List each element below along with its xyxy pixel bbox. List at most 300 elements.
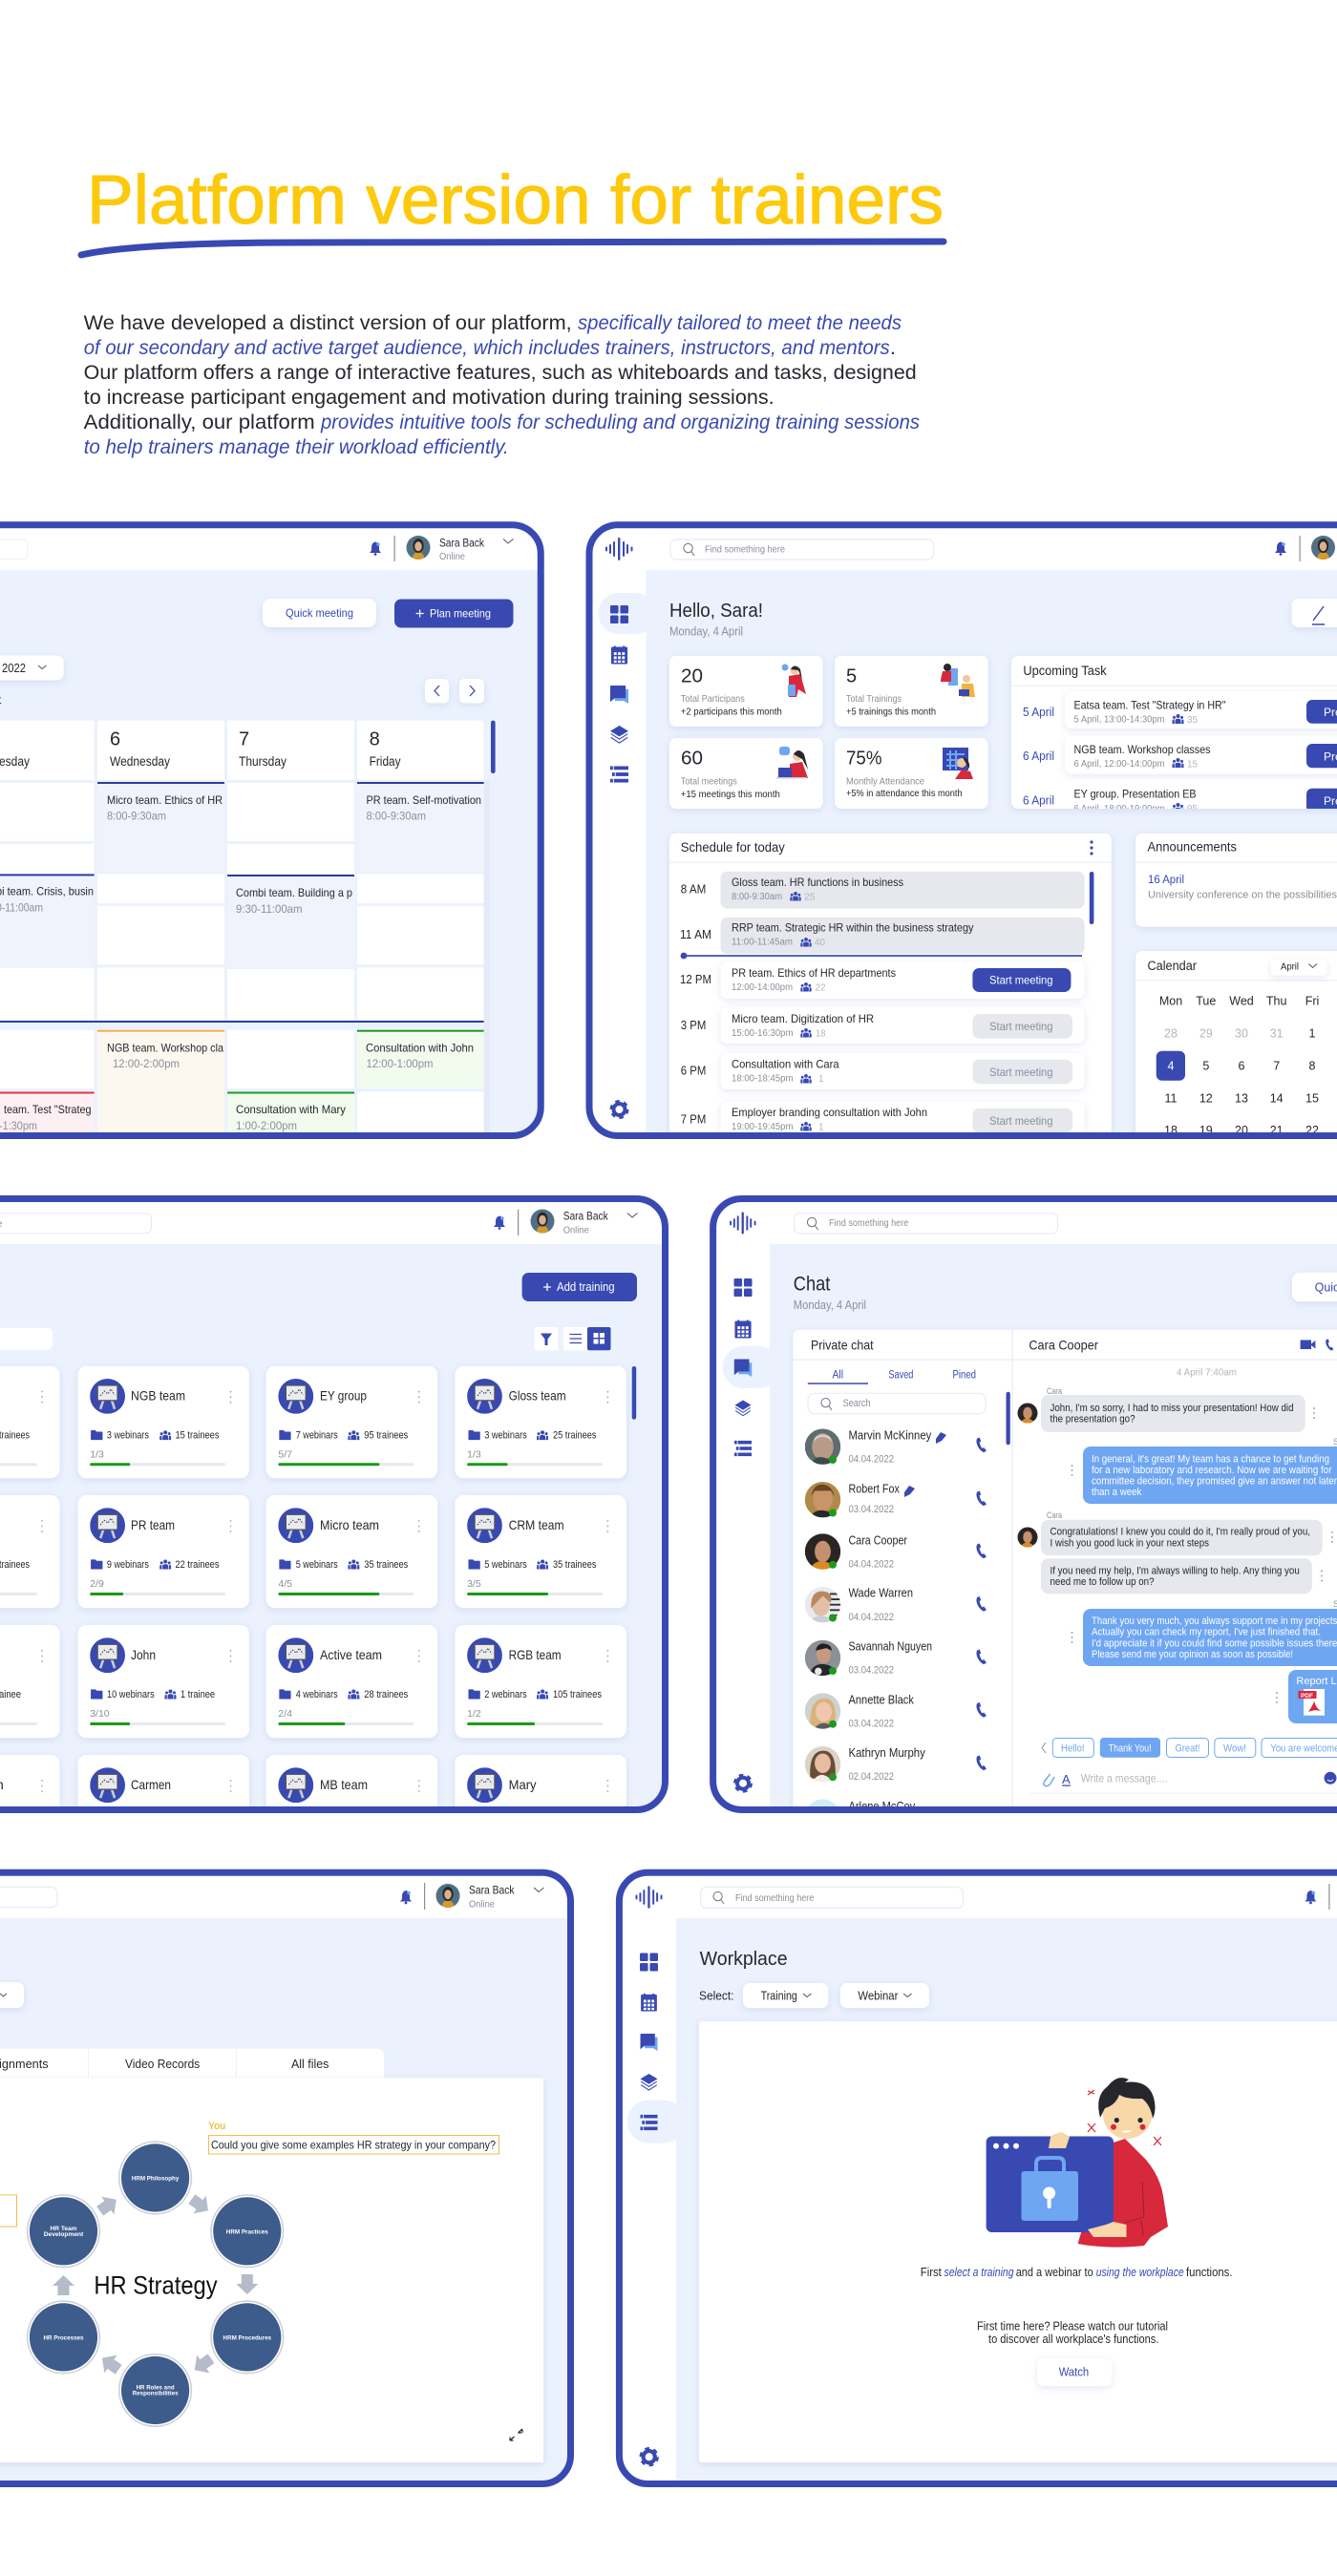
card: Micro team: 4/5 — [278, 1578, 292, 1590]
contact: Kathryn Murphy — [805, 1745, 987, 1783]
contact: Savannah Nguyen: Savannah Nguyen — [848, 1639, 932, 1654]
card: Carmen: Carmen — [131, 1777, 171, 1792]
partial cards column — [0, 1366, 59, 1868]
page heading: Chat — [794, 1274, 830, 1296]
schedule row 4: 18 — [816, 1029, 826, 1039]
private chat list: All — [833, 1369, 843, 1381]
day headers: Friday — [370, 754, 401, 769]
message from Cara 3: need me to follow up on? — [1050, 1576, 1154, 1588]
card: CRM team: 3/5 — [467, 1578, 481, 1590]
scrollbar — [632, 1366, 636, 1420]
card: Micro team: 35 trainees — [364, 1559, 409, 1571]
stat card: attendance: +5% in attendance this month — [846, 788, 963, 799]
calendar widget: Tue — [1196, 995, 1216, 1008]
task row 3: 6 April, 18:00-19:00pm — [1073, 804, 1165, 814]
schedule row 2: RRP team. Strategic HR within the business strategy — [732, 921, 973, 935]
day headers: 7 — [239, 729, 249, 750]
stat card: meetings: +15 meetings this month — [681, 789, 780, 800]
announcements card: University conference on the possibilities — [1148, 890, 1337, 901]
schedule row 4: 15:00-16:30pm — [732, 1028, 793, 1039]
contact: Cara Cooper: Cara Cooper — [848, 1532, 908, 1547]
calendar widget: 14 — [1270, 1092, 1284, 1106]
contact: Arlene McCoy: Arlene McCoy — [848, 1799, 916, 1813]
calendar widget: Mon — [1159, 995, 1182, 1008]
selectors: Webinar — [858, 1989, 898, 2002]
schedule row 1: 25 — [804, 892, 816, 903]
card: Gloss team: 3 webinars — [484, 1430, 527, 1442]
whiteboard content — [0, 2078, 543, 2462]
schedule row 5: 18:00-18:45pm — [732, 1074, 793, 1085]
header bar — [0, 1209, 638, 1236]
card: RGB team: 1/2 — [467, 1708, 481, 1720]
reply message 1 — [1072, 1437, 1337, 1504]
card: CRM team: CRM team — [509, 1517, 564, 1532]
search box — [795, 1214, 1057, 1234]
schedule row 4: 3 PM — [681, 1019, 706, 1032]
search box — [701, 1887, 963, 1908]
arrow: team to philosophy — [94, 2190, 122, 2220]
schedule for today card — [669, 834, 1112, 1149]
schedule row 3: 12:00-14:00pm — [732, 982, 793, 993]
stat card: participants — [669, 656, 823, 727]
calendar widget: 19 — [1199, 1124, 1213, 1137]
watch button: Watch — [1059, 2366, 1089, 2379]
schedule row 2: 40 — [815, 938, 825, 948]
reply message 2: Please send me your opinion as soon as possible! — [1092, 1649, 1293, 1660]
card: NGB team: 1/3 — [90, 1449, 104, 1461]
intro paragraph — [84, 312, 920, 458]
HR strategy diagram — [28, 2142, 284, 2426]
edit button — [1291, 599, 1337, 627]
dropdown — [0, 1982, 24, 2008]
arrow: roles to processes — [96, 2349, 125, 2378]
partial note box — [0, 2195, 17, 2227]
day headers: Thursday — [239, 754, 286, 769]
card: PR team: PR team — [131, 1517, 175, 1532]
contact: Wade Warren — [805, 1586, 987, 1623]
private chat list: Pined — [953, 1369, 976, 1381]
hint text — [921, 2266, 1232, 2279]
quick reply chips: Wow! — [1223, 1743, 1246, 1755]
calendar navigation arrows — [425, 679, 484, 703]
announcements card: 16 April — [1148, 875, 1184, 886]
tabs: ignments — [0, 2057, 49, 2071]
calendar widget: Wed — [1229, 995, 1254, 1008]
calendar widget: 12 — [1199, 1092, 1213, 1106]
plan meeting button: Plan meeting — [430, 607, 491, 621]
stat card: attendance: 75% — [846, 749, 882, 770]
selectors: Training — [761, 1989, 797, 2002]
current time line — [0, 1021, 484, 1023]
task row 1 — [1023, 691, 1337, 728]
node: HR Team Development — [28, 2195, 99, 2268]
card: John: John — [131, 1647, 156, 1662]
stat card: participants: +2 participans this month — [681, 707, 782, 718]
panel: trainings screen — [0, 1198, 668, 1868]
card: Active team — [266, 1625, 437, 1738]
schedule row 1: 8:00-9:30am — [732, 892, 782, 902]
task row 3 — [1024, 789, 1337, 809]
card: PR team — [78, 1495, 249, 1608]
calendar widget: 13 — [1235, 1092, 1248, 1106]
task row 3: 95 — [1187, 804, 1199, 814]
task row 1: 5 April — [1023, 705, 1054, 719]
header bar: Sara Back — [563, 1210, 608, 1223]
day headers: Wednesday — [110, 754, 170, 769]
tutorial text — [977, 2319, 1168, 2346]
notification and avatar — [1275, 536, 1335, 561]
schedule row 6: 7 PM — [681, 1112, 706, 1126]
month dropdown — [0, 655, 64, 707]
schedule row 3: 22 — [816, 983, 826, 993]
partial cards column: trainees — [0, 1430, 30, 1442]
calendar grid — [0, 721, 490, 1140]
calendar widget: 28 — [1164, 1027, 1178, 1041]
panel: workplace screen — [611, 1872, 1337, 2491]
day headers: 8 — [370, 729, 380, 750]
card: PR team: 2/9 — [90, 1578, 104, 1590]
card: EY group — [266, 1366, 437, 1478]
quick reply chips: Thank You! — [1109, 1743, 1152, 1755]
plan meeting button — [394, 600, 514, 628]
upcoming task card — [1011, 656, 1337, 814]
quick meeting button — [1292, 1273, 1337, 1301]
selectors — [699, 1983, 929, 2008]
user note label: Could you give some examples HR strategy in your company? — [211, 2139, 496, 2152]
card: John: 3/10 — [90, 1708, 110, 1720]
panel: materials screen — [0, 1872, 578, 2491]
logo — [605, 538, 632, 560]
calendar widget: 22 — [1305, 1124, 1319, 1137]
event: NGB workshop: NGB team. Workshop cla — [107, 1043, 223, 1054]
schedule row 1: 8 AM — [681, 882, 706, 896]
center label: HR Strategy — [94, 2270, 218, 2299]
intro paragraph: provides intuitive tools for scheduling and organizing training sessions — [320, 412, 920, 433]
page heading: Workplace — [700, 1949, 788, 1970]
month dropdown: 2022 — [2, 662, 26, 675]
message from Cara 2: I wish you good luck in your next steps — [1050, 1537, 1209, 1549]
node: HRM Procedures: HRM Procedures — [223, 2334, 271, 2341]
scrollbar — [491, 721, 496, 773]
card: Mary: Mary — [509, 1777, 537, 1792]
quick reply chips: Great! — [1175, 1743, 1199, 1755]
message from Cara 1: John, I'm so sorry, I had to miss your presentation! How did — [1050, 1403, 1293, 1414]
event: consultation with John: Consultation with John — [366, 1043, 474, 1054]
day headers: 6 — [110, 729, 120, 750]
tutorial text: First time here? Please watch our tutorial — [977, 2319, 1168, 2333]
selectors: Select: — [699, 1988, 733, 2002]
hint text: First — [921, 2266, 942, 2279]
calendar widget: Thu — [1266, 995, 1287, 1008]
schedule row 5: Consultation with Cara — [732, 1058, 839, 1071]
schedule row 4: Micro team. Digitization of HR — [732, 1012, 874, 1025]
quick reply chips — [1042, 1738, 1337, 1758]
contact: Cara Cooper: 04.04.2022 — [848, 1558, 894, 1570]
header bar: Online — [563, 1225, 589, 1236]
contact: Kathryn Murphy: 02.04.2022 — [848, 1771, 894, 1783]
card: RGB team: 105 trainees — [553, 1689, 602, 1700]
node: HR Team Development: HR Team — [50, 2226, 77, 2232]
card: RGB team: 2 webinars — [484, 1689, 527, 1700]
card: Carmen — [78, 1755, 249, 1868]
tutorial text: to discover all workplace's functions. — [988, 2333, 1158, 2346]
sidebar icons — [733, 1278, 753, 1791]
node: HRM Practices — [211, 2195, 284, 2268]
card: RGB team — [455, 1625, 626, 1738]
calendar widget: 5 — [1202, 1060, 1209, 1073]
node: HR Processes — [28, 2301, 99, 2374]
card: NGB team: NGB team — [131, 1388, 185, 1404]
node: HR Roles and Responsibilities: Responsibilities — [133, 2391, 179, 2397]
calendar widget: 4 — [1168, 1060, 1175, 1073]
header bar: Sara Back — [469, 1884, 515, 1897]
title: Platform version for trainers — [87, 162, 944, 239]
card: NGB team: 15 trainees — [176, 1430, 220, 1442]
contact: Annette Black: 03.04.2022 — [848, 1718, 894, 1729]
stat card: trainings: Total Trainings — [846, 693, 902, 705]
node: HRM Philosophy: HRM Philosophy — [132, 2175, 180, 2183]
calendar widget: 21 — [1270, 1124, 1284, 1137]
hint text: and a webinar to — [1016, 2266, 1093, 2279]
calendar widget: 8 — [1309, 1060, 1316, 1073]
event: combi team: 9:30-11:00am — [236, 903, 302, 916]
contact: Savannah Nguyen — [805, 1639, 987, 1677]
quick meeting button: Quick meeting — [286, 606, 353, 620]
contact: Marvin McKinney: 04.04.2022 — [848, 1454, 894, 1466]
event: NGB workshop — [97, 1030, 224, 1140]
calendar widget: 29 — [1199, 1027, 1213, 1041]
event: PR team: 8:00-9:30am — [367, 811, 426, 823]
schedule row 6: 19:00-19:45pm — [732, 1122, 793, 1132]
schedule row 5 — [681, 1053, 1085, 1089]
title underline stroke — [81, 242, 944, 255]
schedule row 4 — [681, 1007, 1085, 1044]
partial cards column: trainees — [0, 1559, 30, 1571]
contact: Robert Fox: 03.04.2022 — [848, 1504, 894, 1515]
node: HRM Philosophy — [119, 2142, 191, 2214]
add training button — [522, 1273, 637, 1301]
calendar widget: 31 — [1270, 1027, 1284, 1041]
card: EY group: EY group — [320, 1388, 367, 1404]
header bar: Sara Back — [439, 536, 485, 549]
contact: Robert Fox — [805, 1481, 987, 1517]
calendar widget: 1 — [1309, 1027, 1316, 1041]
card: Active team: 4 webinars — [296, 1689, 338, 1700]
card: John: 10 webinars — [107, 1689, 155, 1700]
watch button — [1037, 2358, 1112, 2386]
panel: meeting calendar screen — [0, 524, 544, 1143]
stat card: meetings: Total meetings — [681, 776, 737, 788]
collapse icon — [510, 2429, 522, 2440]
user note label: You — [208, 2121, 225, 2132]
header bar — [0, 536, 514, 562]
tabs: All files — [291, 2057, 329, 2071]
event: micro team: 8:00-9:30am — [107, 811, 166, 823]
message from Cara 2 — [1018, 1510, 1333, 1555]
card: Active team: Active team — [320, 1647, 382, 1662]
contact: Marvin McKinney — [805, 1428, 987, 1466]
schedule row 2: 11 AM — [680, 928, 711, 941]
contact: Annette Black: Annette Black — [848, 1692, 914, 1706]
card: John: 1 trainee — [180, 1689, 215, 1700]
calendar widget: 15 — [1305, 1092, 1319, 1106]
greeting heading: Monday, 4 April — [669, 625, 743, 639]
user note label — [208, 2121, 499, 2154]
hint text: using the workplace — [1096, 2266, 1184, 2279]
schedule row 1: Gloss team. HR functions in business — [732, 876, 903, 889]
workplace content card — [699, 2021, 1337, 2462]
search box: Find something here — [829, 1218, 909, 1229]
event: PR team: PR team. Self-motivation — [367, 794, 481, 807]
schedule row 3 — [680, 961, 1085, 999]
card: CRM team — [455, 1495, 626, 1608]
card: Micro team — [266, 1495, 437, 1608]
event: test strategy: team. Test "Strateg — [4, 1104, 92, 1116]
greeting heading: Hello, Sara! — [669, 601, 763, 622]
schedule row 1 — [681, 872, 1085, 909]
contact: Robert Fox: Robert Fox — [848, 1481, 900, 1495]
quick meeting button — [263, 599, 376, 627]
card: PR team: 22 trainees — [176, 1559, 220, 1571]
task row 2: NGB team. Workshop classes — [1073, 743, 1211, 756]
contact: Wade Warren: Wade Warren — [848, 1586, 913, 1600]
calendar widget: Calendar — [1148, 959, 1197, 973]
stat card: attendance — [835, 738, 988, 809]
card: Active team: 28 trainees — [364, 1689, 409, 1700]
calendar widget: April — [1281, 961, 1299, 972]
event: consultation with John — [357, 1030, 484, 1088]
upcoming task card: Upcoming Task — [1023, 664, 1107, 678]
card: Micro team: Micro team — [320, 1517, 379, 1532]
day headers: esday — [0, 754, 30, 769]
message input: A — [1062, 1772, 1071, 1786]
event: NGB workshop: 12:00-2:00pm — [113, 1058, 180, 1070]
schedule row 5: 1 — [818, 1074, 824, 1085]
schedule for today card: Schedule for today — [681, 840, 785, 855]
calendar widget: 6 — [1239, 1060, 1245, 1073]
card: Mary — [455, 1755, 626, 1868]
schedule row 5: 6 PM — [681, 1065, 706, 1078]
message from Cara 3: If you need my help, I'm always willing to help. Any thing you — [1050, 1565, 1300, 1576]
event: consultation with John: 12:00-1:00pm — [367, 1058, 434, 1070]
event: consultation with Mary — [227, 1092, 354, 1132]
event: consultation with Mary: 1:00-2:00pm — [236, 1120, 297, 1132]
node: HR Roles and Responsibilities: HR Roles and — [137, 2385, 175, 2391]
logo — [636, 1886, 663, 1909]
contact: Marvin McKinney: Marvin McKinney — [848, 1428, 932, 1443]
task row 1: Eatsa team. Test "Strategy in HR" — [1073, 699, 1226, 712]
panel: dashboard screen — [583, 524, 1337, 1151]
add training button: Add training — [557, 1280, 615, 1294]
quick reply chips: Hello! — [1061, 1743, 1085, 1755]
card: Active team: 2/4 — [278, 1708, 292, 1720]
stat card: participants: Total Participans — [681, 693, 745, 705]
contact: Arlene McCoy — [805, 1799, 916, 1835]
message from Cara 2: Cara — [1047, 1510, 1062, 1520]
task row 1: 35 — [1187, 715, 1198, 726]
card: MB team: MB team — [320, 1777, 368, 1792]
stat card: trainings: 5 — [846, 666, 857, 687]
contact: Cara Cooper — [805, 1532, 987, 1570]
reply message 1: than a week — [1092, 1487, 1142, 1498]
intro paragraph: . — [890, 337, 896, 359]
search box — [670, 539, 934, 560]
contact: Kathryn Murphy: Kathryn Murphy — [848, 1745, 925, 1760]
private chat list: Saved — [888, 1369, 913, 1381]
card: PR team: 9 webinars — [107, 1559, 149, 1571]
message from Cara 1 — [1018, 1386, 1315, 1432]
intro paragraph: to help trainers manage their workload efficiently. — [84, 436, 509, 458]
schedule row 6: Employer branding consultation with John — [732, 1106, 927, 1119]
chat card — [793, 1330, 1337, 1835]
hint text: functions. — [1186, 2266, 1232, 2279]
illustration: person holding locked window — [987, 2078, 1168, 2248]
sidebar active highlight — [722, 1346, 779, 1388]
tabs: Video Records — [125, 2057, 201, 2071]
sidebar icons — [610, 605, 628, 1118]
calendar widget: 20 — [1235, 1124, 1248, 1137]
event: micro team: Micro team. Ethics of HR — [107, 794, 223, 807]
schedule row 6: Start meeting — [989, 1114, 1052, 1128]
intro paragraph: to increase participant engagement and motivation during training sessions. — [84, 387, 775, 409]
card: CRM team: 35 trainees — [553, 1559, 597, 1571]
card: Gloss team — [455, 1366, 626, 1478]
node: HR Roles and Responsibilities — [119, 2354, 191, 2426]
search box: Find something here — [705, 545, 785, 556]
attachment message: PDF — [1301, 1693, 1313, 1700]
announcements card — [1135, 834, 1337, 927]
sidebar active highlight — [627, 2101, 685, 2143]
message from Cara 3 — [1041, 1558, 1323, 1594]
message input — [1030, 1772, 1337, 1794]
greeting heading — [669, 601, 763, 639]
calendar widget — [1135, 951, 1337, 1151]
attachment message — [1276, 1670, 1337, 1723]
event: micro team — [97, 782, 224, 819]
stat card: attendance: Monthly Attendance — [846, 776, 924, 788]
tabs — [0, 2049, 384, 2078]
node: HR Processes: HR Processes — [44, 2334, 84, 2341]
event: test strategy — [0, 1092, 95, 1132]
card: NGB team: 3 webinars — [107, 1430, 149, 1442]
event: combi team — [227, 875, 354, 913]
private chat list: Private chat — [811, 1337, 874, 1352]
node: HRM Procedures — [211, 2301, 284, 2374]
conversation pane — [1018, 1337, 1337, 1794]
calendar widget: Fri — [1305, 995, 1319, 1008]
task row 1: 5 April, 13:00-14:30pm — [1073, 715, 1165, 726]
task row 3: EY group. Presentation EB — [1073, 788, 1196, 801]
filter pill — [0, 1328, 53, 1350]
task row 3: 6 April — [1023, 793, 1054, 808]
event: crisis — [0, 874, 95, 911]
schedule row 6: 1 — [818, 1123, 824, 1132]
event: test strategy: -1:30pm — [0, 1120, 37, 1132]
schedule row 4: Start meeting — [989, 1020, 1052, 1033]
contact: Annette Black — [805, 1692, 987, 1729]
conversation pane: Cara Cooper — [1029, 1337, 1098, 1352]
calendar widget: 7 — [1273, 1060, 1280, 1073]
message from Cara 1: the presentation go? — [1050, 1414, 1135, 1425]
current time indicator — [681, 953, 1082, 959]
intro paragraph: of our secondary and active target audience, which includes trainers, instructors, and mentors — [84, 337, 890, 359]
event: consultation with Mary: Consultation with Mary — [236, 1104, 346, 1116]
card: RGB team: RGB team — [509, 1647, 562, 1662]
stat card: meetings — [669, 738, 823, 809]
stat card: meetings: 60 — [681, 749, 703, 770]
intro paragraph: specifically tailored to meet the needs — [578, 312, 902, 334]
calendar widget: 11 — [1165, 1092, 1178, 1106]
